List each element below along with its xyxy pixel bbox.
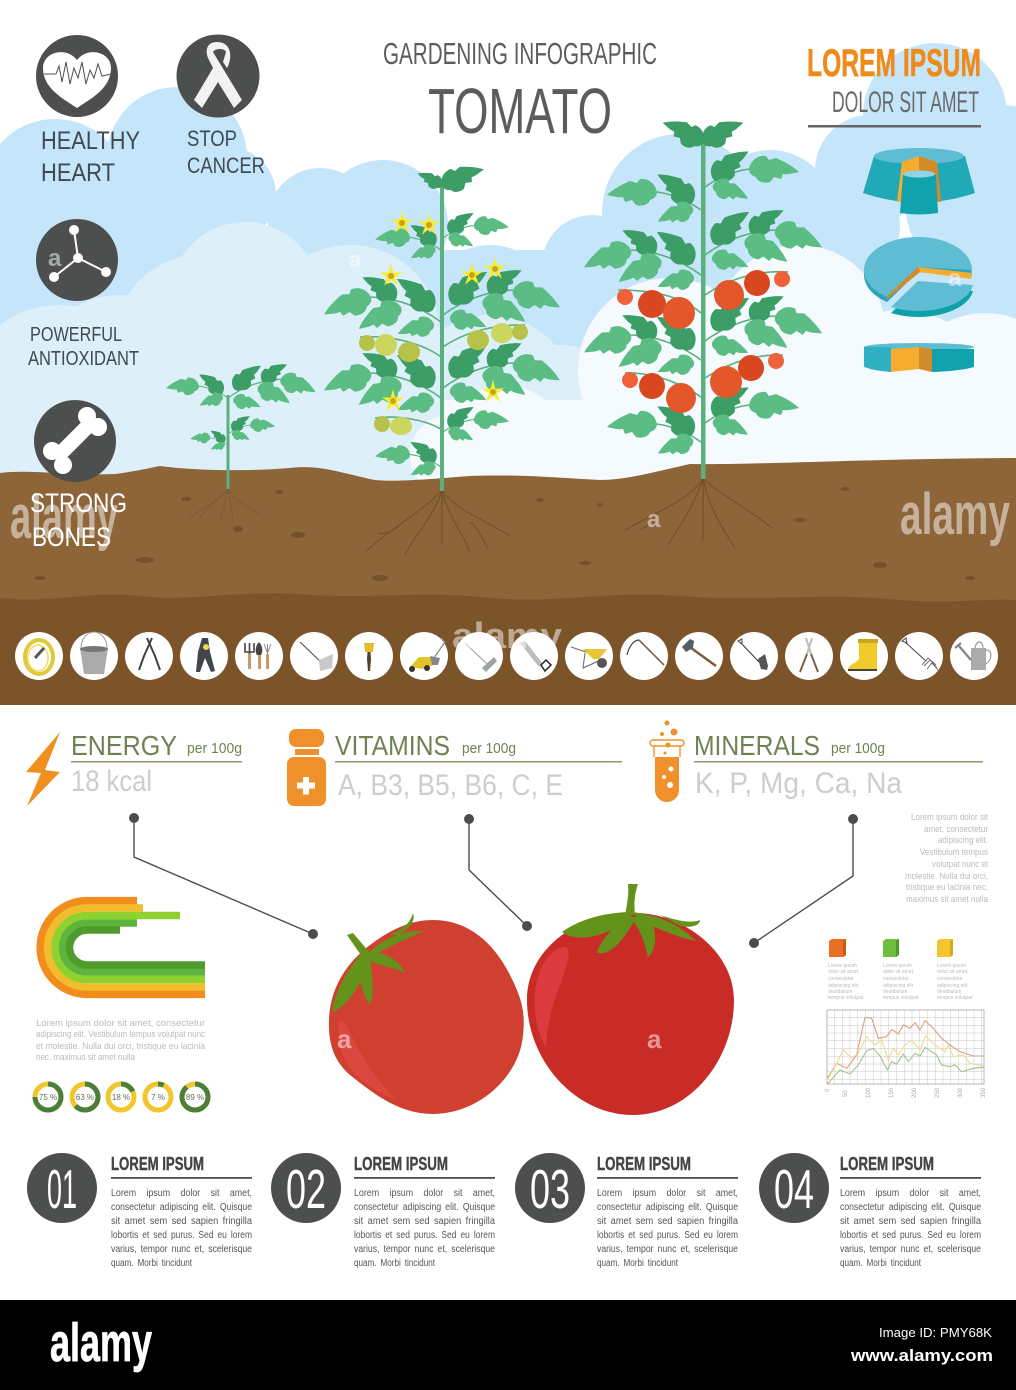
step 04: LOREM IPSUM bbox=[840, 1154, 934, 1174]
icon: hose bbox=[25, 640, 53, 674]
legend cubes: adipiscing elit. bbox=[883, 983, 914, 989]
legend cubes: tempus volutpat bbox=[937, 995, 973, 1001]
badge: strong bones: STRONG bbox=[30, 488, 127, 518]
header: lorem ipsum block bbox=[807, 42, 981, 128]
watermarks: alamy bbox=[10, 483, 118, 552]
icon: garden rake bbox=[465, 643, 497, 672]
step 01: quam. Morbi tincidunt bbox=[111, 1258, 192, 1269]
3D chart: exploded pie bbox=[864, 237, 973, 317]
clouds: near-white front layer bbox=[410, 245, 1016, 510]
badge: healthy heart: HEART bbox=[41, 159, 115, 187]
icon: shovel bbox=[738, 639, 768, 670]
connector lines bbox=[129, 813, 858, 948]
step 02: Lorem ipsum dolor sit amet, bbox=[354, 1188, 495, 1199]
step 02: varius, tempor nunc et, scelerisque bbox=[354, 1244, 495, 1255]
icon: lawn mower bbox=[409, 638, 445, 672]
text block: left caption bbox=[36, 1018, 206, 1063]
text block: right caption bbox=[905, 812, 989, 905]
step 01: 01 bbox=[47, 1158, 77, 1220]
line chart: 150 bbox=[889, 1087, 895, 1098]
red tomatoes bbox=[617, 270, 790, 413]
soil bbox=[0, 458, 1016, 705]
step 01: varius, tempor nunc et, scelerisque bbox=[111, 1244, 252, 1255]
badge: powerful antioxidant: POWERFUL bbox=[30, 324, 122, 346]
vitamins section bbox=[287, 729, 622, 806]
icon: rubber boot bbox=[848, 639, 878, 671]
legend cubes: consectetur bbox=[828, 976, 854, 982]
icon: sickle bbox=[627, 640, 664, 665]
legend cubes: tempus volutpat bbox=[828, 995, 864, 1001]
line chart: 300 bbox=[958, 1087, 964, 1098]
footer bar bbox=[0, 1300, 1016, 1390]
legend cubes: Vestibulum bbox=[883, 989, 907, 995]
step 02: consectetur adipiscing elit. Quisque bbox=[354, 1202, 495, 1213]
energy section: per 100g bbox=[187, 740, 242, 757]
badge: healthy heart: HEALTHY bbox=[41, 127, 140, 155]
line chart: 0 bbox=[825, 1088, 831, 1092]
badge: powerful antioxidant bbox=[28, 219, 139, 370]
watermarks: a bbox=[337, 1024, 352, 1054]
flowering plant bbox=[319, 156, 565, 555]
step 02: LOREM IPSUM bbox=[354, 1154, 448, 1174]
watermarks: a bbox=[48, 245, 62, 272]
step 03: quam. Morbi tincidunt bbox=[597, 1258, 678, 1269]
line chart: 200 bbox=[912, 1087, 918, 1098]
3D chart: truncated cone bbox=[863, 148, 975, 214]
legend cubes: Lorem ipsum bbox=[937, 963, 966, 969]
step 02: 02 bbox=[286, 1158, 326, 1220]
step 02: lobortis et sed purus. Sed eu lorem bbox=[354, 1230, 495, 1241]
footer bar: Image ID: PMY68K bbox=[879, 1325, 992, 1340]
text block: left caption: et molestie. Nulla dui orci, tristique eu lacinia bbox=[36, 1041, 206, 1052]
icon: axe bbox=[682, 639, 716, 666]
icon: test tube bbox=[650, 720, 684, 802]
step 03: sit amet sem sed sapien fringilla bbox=[597, 1216, 738, 1227]
step 04: 04 bbox=[774, 1158, 814, 1220]
step 01: consectetur adipiscing elit. Quisque bbox=[111, 1202, 252, 1213]
icon: bucket bbox=[80, 632, 108, 674]
clouds: pale middle layer bbox=[0, 222, 645, 515]
badge: stop cancer bbox=[176, 34, 265, 178]
badge: strong bones: BONES bbox=[32, 522, 111, 552]
step 03: Lorem ipsum dolor sit amet, bbox=[597, 1188, 738, 1199]
icon: hand saw bbox=[520, 641, 551, 671]
footer bar: alamy bbox=[50, 1313, 152, 1373]
watermarks: a bbox=[948, 265, 962, 292]
vitamins section: VITAMINS bbox=[335, 730, 450, 761]
text block: left caption: nec, maximus sit amet nulla bbox=[36, 1052, 136, 1063]
legend cubes: adipiscing elit. bbox=[828, 983, 859, 989]
step 03: 03 bbox=[530, 1158, 570, 1220]
legend cubes: Lorem ipsum bbox=[828, 963, 857, 969]
step 01: lobortis et sed purus. Sed eu lorem bbox=[111, 1230, 252, 1241]
left tomato bbox=[329, 913, 524, 1114]
title bbox=[383, 36, 657, 147]
icon: leaf rake bbox=[300, 642, 333, 671]
icon: hand tools bbox=[245, 642, 271, 669]
legend cubes: dolor sit amet, bbox=[883, 969, 914, 975]
yellow flowers bbox=[380, 211, 506, 411]
step 02 bbox=[271, 1153, 495, 1269]
fruiting plant bbox=[579, 110, 827, 548]
rainbow arc chart bbox=[40, 901, 205, 994]
watermarks: a bbox=[647, 506, 661, 533]
step 01: sit amet sem sed sapien fringilla bbox=[111, 1216, 252, 1227]
legend cubes: Vestibulum bbox=[937, 989, 961, 995]
watermarks: a bbox=[349, 247, 362, 272]
badge: healthy heart bbox=[36, 35, 140, 187]
step 01 bbox=[27, 1153, 252, 1269]
text block: left caption: Lorem ipsum dolor sit amet, consectetur bbox=[36, 1018, 205, 1029]
step 04: varius, tempor nunc et, scelerisque bbox=[840, 1244, 981, 1255]
text block: right caption: Lorem ipsum dolor sit bbox=[911, 812, 988, 823]
text block: right caption: volutpat nunc et bbox=[932, 859, 988, 870]
energy section bbox=[26, 730, 242, 806]
line chart: 100 bbox=[866, 1087, 872, 1098]
icon: hedge shears bbox=[800, 638, 818, 672]
text block: right caption: tristique eu lacinia nec, bbox=[906, 882, 988, 893]
minerals section: MINERALS bbox=[694, 730, 820, 761]
step 04: consectetur adipiscing elit. Quisque bbox=[840, 1202, 981, 1213]
step 02: quam. Morbi tincidunt bbox=[354, 1258, 435, 1269]
text block: left caption: adipiscing elit. Vestibulum tempus volutpat nunc bbox=[36, 1029, 205, 1040]
badge: strong bones bbox=[30, 400, 127, 552]
legend cubes: consectetur bbox=[937, 976, 963, 982]
roots: fruiting plant bbox=[625, 478, 772, 548]
donut percentages: 7 % bbox=[151, 1093, 165, 1102]
legend cubes bbox=[828, 939, 973, 1001]
calyx: left tomato bbox=[332, 913, 423, 1012]
icon: watering can bbox=[955, 642, 991, 670]
text block: right caption: maximus sit amet nulla bbox=[906, 894, 989, 905]
step 04: sit amet sem sed sapien fringilla bbox=[840, 1216, 981, 1227]
roots: flowering plant bbox=[365, 490, 510, 555]
minerals section bbox=[650, 720, 983, 802]
icon: wheelbarrow bbox=[571, 647, 607, 668]
text block: right caption: Vestibulum tempus bbox=[920, 847, 988, 858]
step 04 bbox=[759, 1153, 981, 1269]
watermarks: a bbox=[647, 1024, 662, 1054]
step 04: Lorem ipsum dolor sit amet, bbox=[840, 1188, 981, 1199]
energy section: 18 kcal bbox=[71, 765, 152, 798]
roots: seedling bbox=[190, 488, 260, 522]
footer bar: www.alamy.com bbox=[850, 1346, 993, 1365]
legend cubes: adipiscing elit. bbox=[937, 983, 968, 989]
icon: paint brush bbox=[364, 643, 374, 671]
line chart bbox=[825, 1010, 987, 1098]
tool icons row bbox=[15, 632, 998, 680]
step 01: Lorem ipsum dolor sit amet, bbox=[111, 1188, 252, 1199]
badge: stop cancer: STOP bbox=[187, 126, 237, 151]
donut percentages: 18 % bbox=[112, 1093, 130, 1102]
step 03: consectetur adipiscing elit. Quisque bbox=[597, 1202, 738, 1213]
step 04: quam. Morbi tincidunt bbox=[840, 1258, 921, 1269]
step 03 bbox=[515, 1153, 738, 1269]
energy section: ENERGY bbox=[71, 730, 177, 761]
icon: lightning bolt bbox=[26, 732, 60, 806]
text block: right caption: adipiscing elit. bbox=[938, 835, 988, 846]
icon: secateurs bbox=[196, 638, 215, 672]
legend cubes: Lorem ipsum bbox=[883, 963, 912, 969]
vitamins section: per 100g bbox=[462, 740, 516, 757]
donut percentages: 75 % bbox=[39, 1093, 57, 1102]
badge: powerful antioxidant: ANTIOXIDANT bbox=[28, 348, 139, 370]
step 03: LOREM IPSUM bbox=[597, 1154, 691, 1174]
donut percentages: 63 % bbox=[76, 1093, 94, 1102]
step 03: lobortis et sed purus. Sed eu lorem bbox=[597, 1230, 738, 1241]
icon: loppers bbox=[139, 638, 160, 670]
legend cubes: consectetur bbox=[883, 976, 909, 982]
vitamins section: A, B3, B5, B6, C, E bbox=[338, 769, 563, 802]
legend cubes: dolor sit amet, bbox=[937, 969, 968, 975]
text block: right caption: molestie. Nulla dui orci, bbox=[905, 871, 988, 882]
icon: medicine bottle bbox=[287, 729, 326, 806]
clouds: blue back layer bbox=[0, 43, 1016, 480]
badge: stop cancer: CANCER bbox=[187, 153, 265, 178]
step 01: LOREM IPSUM bbox=[111, 1154, 204, 1174]
legend cubes: tempus volutpat bbox=[883, 995, 919, 1001]
step 04: lobortis et sed purus. Sed eu lorem bbox=[840, 1230, 981, 1241]
green tomatoes bbox=[359, 323, 528, 435]
donut percentages: 89 % bbox=[186, 1093, 204, 1102]
minerals section: per 100g bbox=[831, 740, 885, 757]
title: TOMATO bbox=[428, 75, 612, 147]
line chart: 250 bbox=[935, 1087, 941, 1098]
step 03: varius, tempor nunc et, scelerisque bbox=[597, 1244, 738, 1255]
3D chart: flat disc bbox=[864, 343, 974, 372]
text block: right caption: amet, consectetur bbox=[924, 824, 988, 835]
line chart: 50 bbox=[843, 1090, 849, 1097]
line chart: 350 bbox=[981, 1087, 987, 1098]
icon: garden fork bbox=[902, 638, 938, 670]
seedling plant bbox=[166, 357, 319, 522]
legend cubes: dolor sit amet, bbox=[828, 969, 859, 975]
minerals section: K, P, Mg, Ca, Na bbox=[695, 767, 902, 800]
watermarks: alamy bbox=[452, 615, 562, 656]
calyx: right tomato bbox=[562, 884, 700, 957]
watermarks bbox=[10, 245, 1010, 1054]
legend cubes: Vestibulum bbox=[828, 989, 852, 995]
right tomato bbox=[527, 884, 734, 1115]
donut percentages bbox=[35, 1084, 208, 1110]
step 02: sit amet sem sed sapien fringilla bbox=[354, 1216, 495, 1227]
title: GARDENING INFOGRAPHIC bbox=[383, 36, 657, 71]
